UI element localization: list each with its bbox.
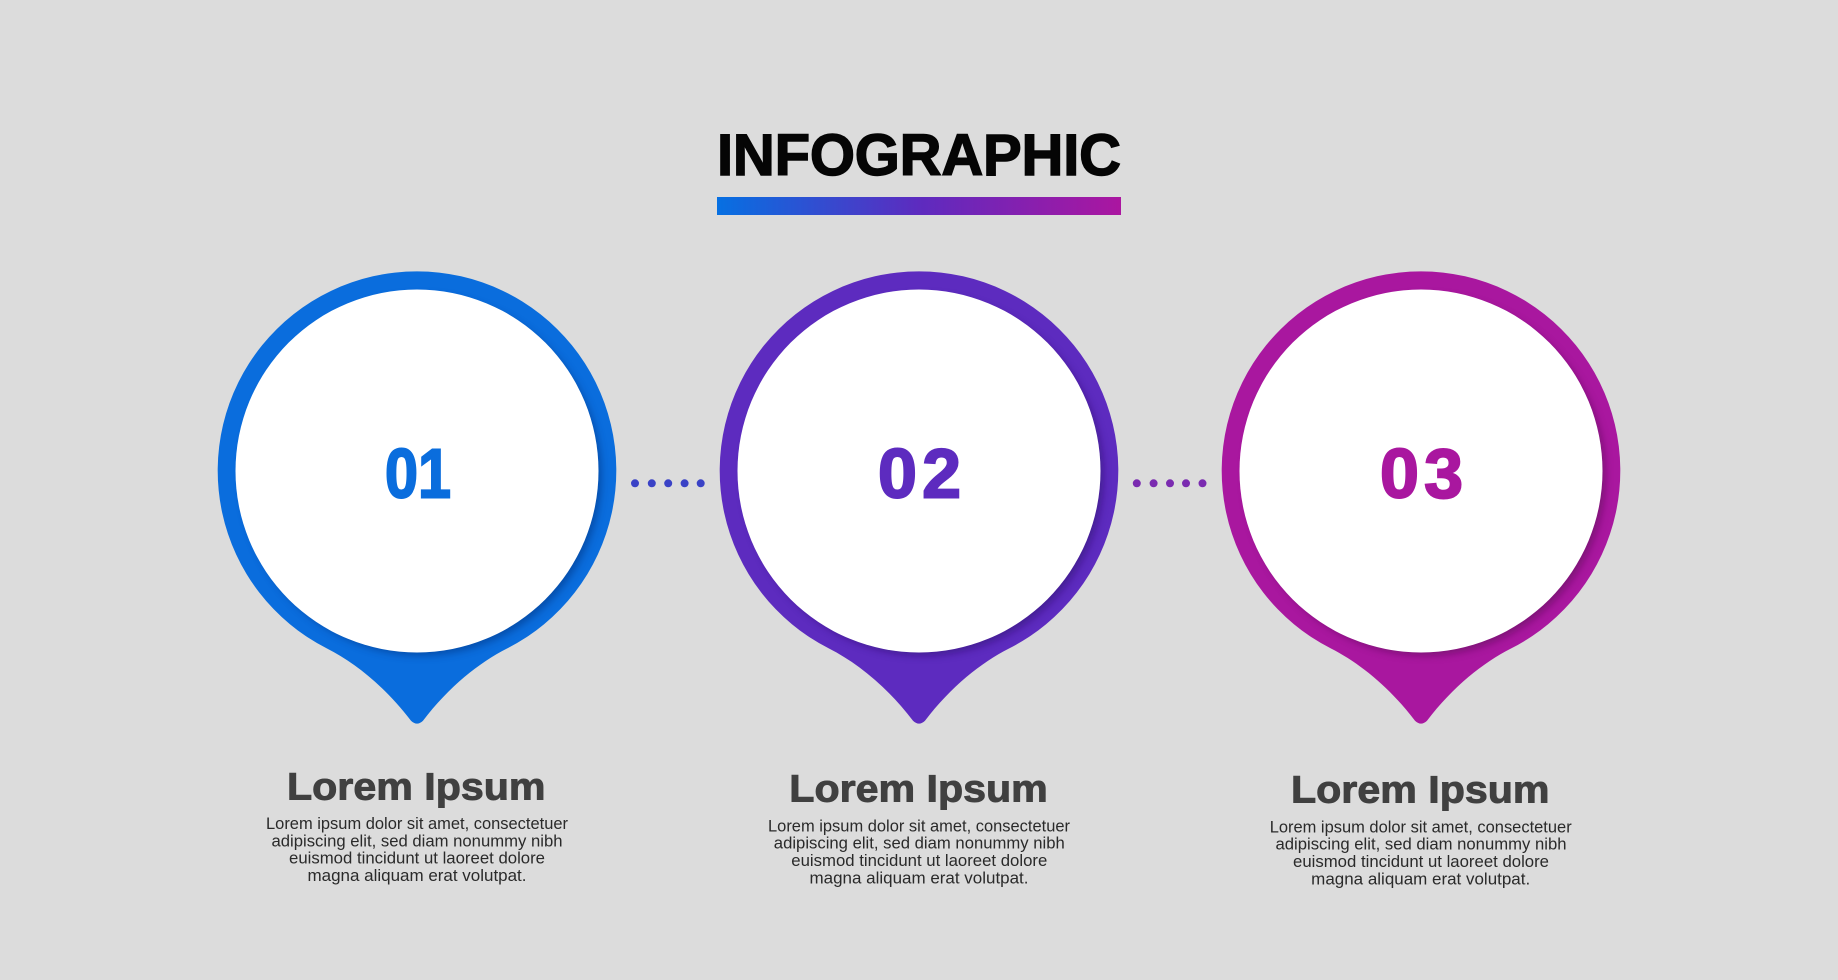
body 2: euismod tincidunt ut laoreet dolore [791,852,1047,870]
body 2: magna aliquam erat volutpat. [810,869,1028,887]
heading 2: Lorem Ipsum [789,769,1048,811]
body 1: adipiscing elit, sed diam nonummy nibh [272,832,562,850]
pin 3 [1222,271,1620,724]
body 1 [266,815,568,885]
title: INFOGRAPHIC [717,123,1121,188]
number 01: 01 [385,434,451,512]
connector dots 1 [631,479,705,487]
body 1: euismod tincidunt ut laoreet dolore [289,850,545,868]
text block 2 [768,769,1070,887]
text block 3 [1270,770,1572,888]
heading 1: Lorem Ipsum [287,766,546,808]
text block 1 [266,766,568,885]
heading 3: Lorem Ipsum [1291,770,1550,812]
pin 2 shape [720,271,1118,724]
title underline gradient bar [717,197,1121,215]
pin 1 shape [218,271,616,724]
body 2: adipiscing elit, sed diam nonummy nibh [774,835,1065,853]
pin 1 [218,271,616,724]
body 2: Lorem ipsum dolor sit amet, consectetuer [768,817,1070,835]
body 3: adipiscing elit, sed diam nonummy nibh [1276,836,1566,854]
pin 1 inner shadow [242,296,602,656]
pin 3 white disc [1240,290,1602,652]
body 3: euismod tincidunt ut laoreet dolore [1293,853,1549,871]
pin 2 white disc [738,290,1100,652]
body 3: magna aliquam erat volutpat. [1311,870,1530,888]
pin 2 [720,271,1118,724]
body 1: magna aliquam erat volutpat. [308,867,526,885]
number 03: 03 [1380,434,1463,512]
body 3: Lorem ipsum dolor sit amet, consectetuer [1270,818,1572,836]
pin 1 white disc [236,290,598,652]
body 3 [1270,818,1572,888]
number 02: 02 [878,434,961,512]
pin 2 inner shadow [744,296,1104,656]
body 2 [768,817,1070,887]
pin 3 inner shadow [1246,296,1606,656]
connector dots 2 [1133,479,1206,487]
pin 3 shape [1222,271,1620,724]
body 1: Lorem ipsum dolor sit amet, consectetuer [266,815,568,833]
